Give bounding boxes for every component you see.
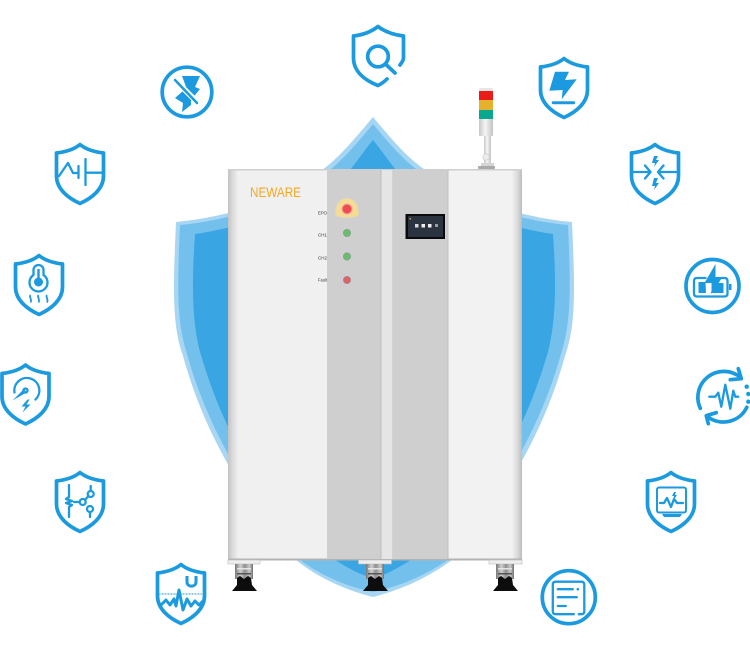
- cabinet feet: [228, 560, 522, 591]
- large background shield: [174, 117, 574, 597]
- signal light tower: [478, 88, 495, 169]
- icon: short circuit arrows shield: [632, 144, 678, 204]
- icon: no lightning circle: [162, 67, 212, 117]
- icon: cyclic waveform: [698, 369, 750, 424]
- icon: voltage surge shield: [158, 564, 204, 624]
- icon: document circle: [542, 571, 595, 624]
- control panel labels and indicators: CH2: [318, 256, 327, 260]
- touch screen: [406, 214, 445, 239]
- control panel labels and indicators: Fault: [318, 278, 328, 282]
- brand logo: NEWARE: [250, 185, 301, 200]
- control panel labels and indicators: EPO: [318, 210, 327, 216]
- control panel labels and indicators: CH1: [318, 232, 327, 238]
- icon: circuit shield: [56, 144, 104, 204]
- icon: battery charging circle: [686, 260, 739, 312]
- icon: gauge shield: [2, 365, 49, 424]
- icon: lightning plate shield: [540, 58, 588, 118]
- icon: monitor waveform shield: [648, 472, 694, 532]
- icon: magnifier shield: [354, 26, 404, 86]
- cabinet body: [228, 169, 522, 560]
- icon: relay shield: [56, 472, 104, 532]
- icon: temperature shield: [16, 256, 62, 314]
- control panel labels and indicators: [318, 198, 358, 284]
